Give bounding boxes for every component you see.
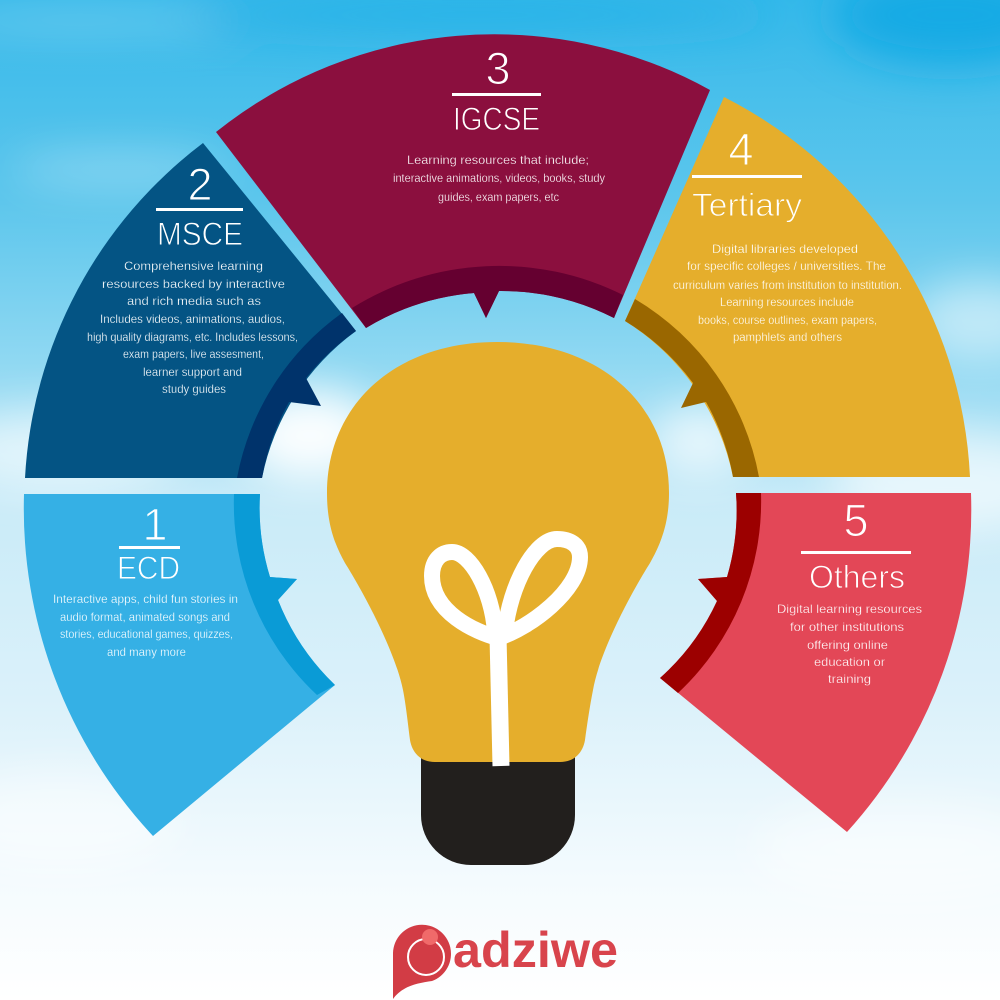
description: MSCE: resources backed by interactive xyxy=(102,277,285,291)
filament xyxy=(432,539,580,766)
number 4: 4 xyxy=(728,124,754,175)
segment shape: IGCSE xyxy=(216,34,710,328)
panel: 3 IGCSE xyxy=(216,34,710,328)
description: ECD: and many more xyxy=(107,645,186,659)
description: Tertiary: pamphlets and others xyxy=(733,330,842,344)
description: ECD: Interactive apps, child fun stories in xyxy=(53,592,238,606)
description: Others: Digital learning resources xyxy=(777,602,922,616)
panel: 5 Others xyxy=(660,493,971,832)
description: Others: offering online xyxy=(807,638,888,652)
heading: MSCE: MSCE xyxy=(157,216,243,252)
icon: light bulb xyxy=(327,342,669,865)
description: ECD: audio format, animated songs and xyxy=(60,610,230,624)
description: ECD: stories, educational games, quizzes, xyxy=(60,627,233,641)
number 1: 1 xyxy=(142,499,168,550)
bulb glass xyxy=(327,342,669,762)
description: Others: training xyxy=(828,672,871,686)
heading: IGCSE: IGCSE xyxy=(453,101,540,137)
rule xyxy=(119,546,180,549)
description: Others: for other institutions xyxy=(790,620,904,634)
segment shape: MSCE xyxy=(25,143,356,478)
description: Tertiary: curriculum varies from institution to institution. xyxy=(673,278,902,292)
description: IGCSE: Learning resources that include; xyxy=(407,153,589,167)
rule xyxy=(156,208,243,211)
logo mark xyxy=(393,925,451,999)
description: Tertiary: Learning resources include xyxy=(720,295,854,309)
description: IGCSE: guides, exam papers, etc xyxy=(438,190,559,204)
description: MSCE: Comprehensive learning xyxy=(124,259,263,273)
description: IGCSE xyxy=(393,153,605,204)
heading: Others: Others xyxy=(809,559,905,595)
description: MSCE: exam papers, live assesment, xyxy=(123,347,264,361)
segment shape: ECD xyxy=(24,494,335,836)
description: MSCE xyxy=(87,259,298,396)
inner band: ECD xyxy=(234,494,335,695)
rule xyxy=(692,175,802,178)
description: IGCSE: interactive animations, videos, books, study xyxy=(393,171,605,185)
description: Tertiary xyxy=(673,242,902,344)
rule xyxy=(452,93,541,96)
heading: ECD: ECD xyxy=(117,550,180,586)
description: MSCE: and rich media such as xyxy=(127,294,261,308)
description: MSCE: Includes videos, animations, audios, xyxy=(100,312,285,326)
bulb base xyxy=(421,750,575,865)
description: Others xyxy=(777,602,922,686)
panel: 2 MSCE xyxy=(25,143,356,478)
heading: Tertiary: Tertiary xyxy=(692,187,802,223)
description: Tertiary: books, course outlines, exam papers, xyxy=(698,313,877,327)
number 3: 3 xyxy=(485,43,511,94)
description: Tertiary: Digital libraries developed xyxy=(712,242,858,256)
inner band: IGCSE xyxy=(352,266,623,328)
inner band: Others xyxy=(660,493,761,693)
inner band: MSCE xyxy=(237,313,356,478)
panel: 4 Tertiary xyxy=(625,97,970,477)
panel: 1 ECD xyxy=(24,494,335,836)
description: MSCE: high quality diagrams, etc. Includes lessons, xyxy=(87,330,298,344)
rule xyxy=(801,551,911,554)
inner band: Tertiary xyxy=(625,299,759,477)
segment shape: Tertiary xyxy=(625,97,970,477)
description: MSCE: learner support and xyxy=(143,365,242,379)
logo: padziwe xyxy=(393,922,618,999)
logo wordmark: adziwe xyxy=(453,922,618,978)
description: Tertiary: for specific colleges / universities. The xyxy=(687,259,886,273)
description: Others: education or xyxy=(814,655,885,669)
description: ECD xyxy=(53,592,238,659)
segment shape: Others xyxy=(660,493,971,832)
number 5: 5 xyxy=(843,495,869,546)
description: MSCE: study guides xyxy=(162,382,226,396)
number 2: 2 xyxy=(187,159,213,210)
